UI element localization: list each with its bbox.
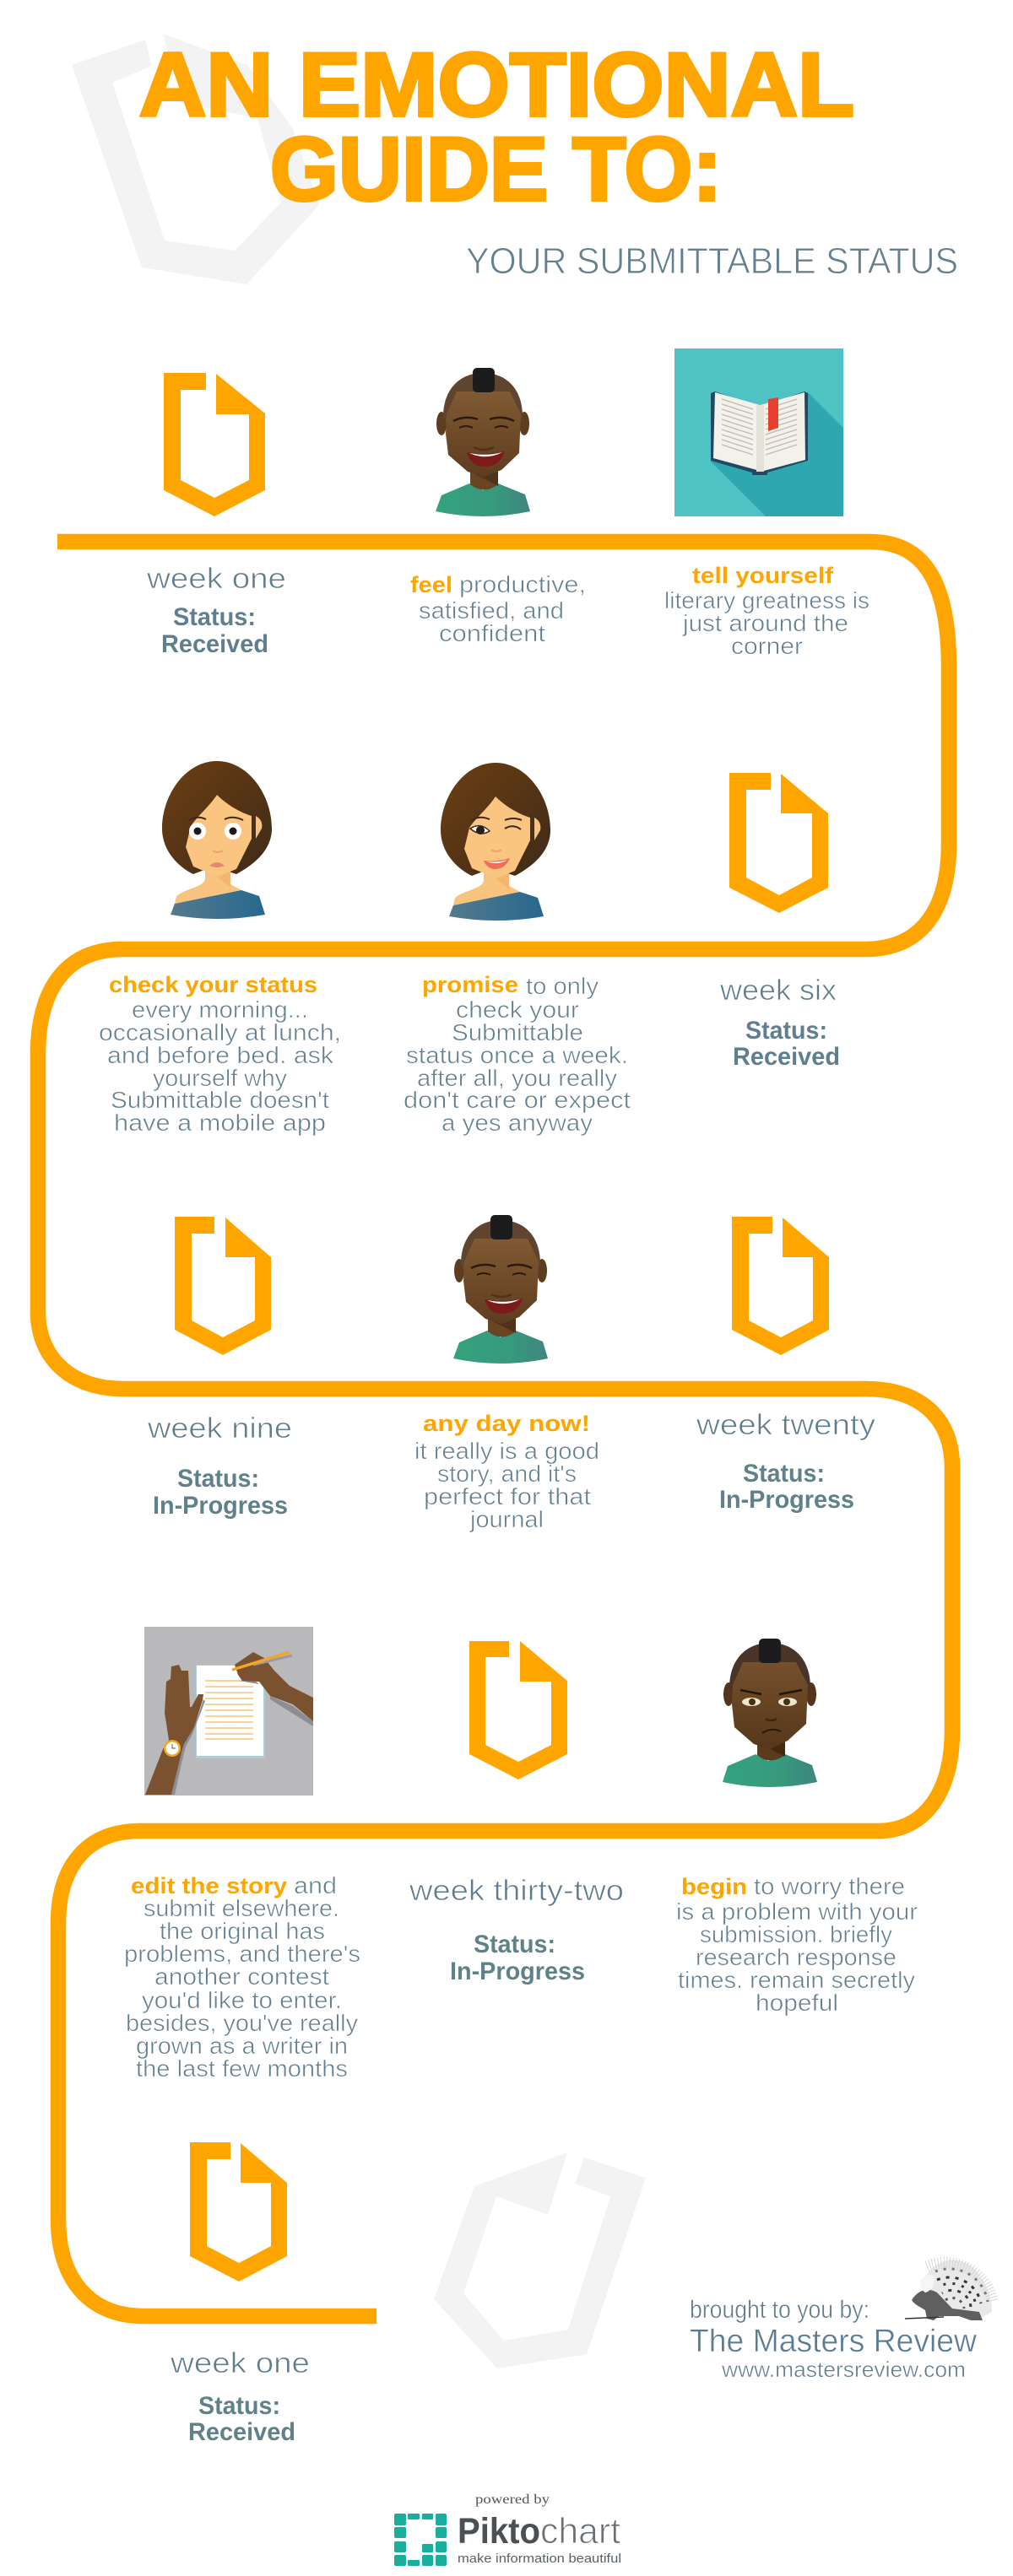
week six label: week six — [719, 975, 837, 1007]
icon: open book tile — [674, 348, 843, 516]
text: promise — [404, 972, 631, 1136]
title: AN EMOTIONAL — [139, 34, 854, 135]
credit: The Masters Review — [690, 2296, 978, 2382]
final week one label: week one — [170, 2347, 310, 2379]
text: edit the story: besides, you've really — [126, 2010, 358, 2036]
logo: Piktochart wordmark: chart — [540, 2511, 620, 2552]
icon: document final week one — [190, 2142, 287, 2282]
logo: Piktochart wordmark — [458, 2511, 621, 2566]
icon: document week twenty — [732, 1217, 829, 1355]
week twenty label: week twenty — [696, 1409, 875, 1441]
week nine label: week nine — [147, 1412, 292, 1445]
text: promise: to only — [526, 973, 599, 999]
text: edit the story: problems, and there's — [124, 1941, 360, 1967]
status in-progress: Status: — [743, 1460, 825, 1488]
status in-progress — [450, 1931, 585, 1985]
text: feel productive — [410, 571, 586, 646]
text: feel productive: confident — [439, 620, 545, 646]
status received: Received — [161, 630, 268, 658]
text: edit the story: edit the story — [131, 1873, 287, 1898]
credit: The Masters Review: brought to you by: — [690, 2296, 869, 2324]
icon: document week nine — [175, 1217, 271, 1355]
status in-progress: Status: — [474, 1931, 555, 1958]
text: begin to worry: is a problem with your — [676, 1898, 918, 1925]
status received: Status: — [173, 603, 256, 631]
avatar: laughing man — [453, 1215, 548, 1364]
text: begin to worry: research response — [696, 1944, 897, 1970]
watermark: bottom document icon — [434, 2152, 646, 2368]
text: check your status: occasionally at lunch, — [99, 1019, 341, 1045]
status received: Received — [733, 1043, 840, 1071]
watermark: top document icon — [72, 34, 319, 284]
text: edit the story: grown as a writer in — [136, 2033, 348, 2059]
icon: document week one — [164, 373, 265, 516]
week thirty-two label: week thirty-two — [409, 1875, 624, 1907]
icon: document week six — [729, 773, 828, 913]
text: any day now: story, and it's — [437, 1461, 577, 1487]
icon: hands writing on paper — [144, 1627, 313, 1796]
text: tell yourself — [664, 563, 869, 659]
status received: Status: — [198, 2392, 280, 2420]
text: any day now: perfect for that — [424, 1483, 591, 1509]
text: promise: status once a week. — [406, 1042, 628, 1068]
text: any day now: it really is a good — [414, 1438, 599, 1464]
title: GUIDE TO: — [270, 118, 722, 219]
text: edit the story: you'd like to enter. — [142, 1987, 342, 2013]
text: feel productive: feel — [410, 572, 452, 597]
text: check your status: check your status — [109, 972, 317, 997]
text: any day now: journal — [469, 1506, 544, 1532]
status in-progress: In-Progress — [153, 1492, 288, 1520]
status in-progress — [719, 1460, 854, 1514]
text: any day now — [414, 1411, 599, 1532]
title — [139, 34, 854, 219]
logo: Piktochart wordmark: Pikto — [458, 2511, 540, 2552]
text: promise: a yes anyway — [441, 1110, 593, 1136]
text: check your status: every morning... — [132, 996, 308, 1023]
credit: The Masters Review: www.mastersreview.com — [721, 2357, 966, 2382]
text: promise: don't care or expect — [404, 1087, 631, 1113]
text: promise: Submittable — [452, 1019, 583, 1045]
logo: Piktochart mark — [394, 2514, 447, 2566]
status received: Status: — [745, 1017, 827, 1045]
text: edit the story: another contest — [154, 1963, 329, 1990]
text: check your status — [99, 972, 341, 1136]
status in-progress: In-Progress — [450, 1958, 585, 1985]
avatar: laughing man — [436, 368, 530, 516]
footer: powered by: powered by — [475, 2492, 550, 2507]
text: check your status: have a mobile app — [114, 1110, 326, 1136]
text: check your status: Submittable doesn't — [111, 1087, 329, 1113]
text: tell yourself: tell yourself — [692, 563, 834, 588]
text: tell yourself: just around the — [682, 610, 848, 636]
status received — [733, 1017, 840, 1071]
status received — [161, 603, 268, 658]
text: begin to worry: begin — [681, 1874, 747, 1899]
avatar: frowning man — [723, 1639, 817, 1787]
text: feel productive: satisfied, and — [419, 597, 564, 624]
text: edit the story — [124, 1872, 360, 2082]
text: promise: check your — [456, 996, 579, 1023]
status received — [188, 2392, 295, 2446]
status in-progress: In-Progress — [719, 1486, 854, 1514]
text: begin to worry — [676, 1873, 918, 2016]
text: check your status: and before bed. ask — [107, 1042, 334, 1068]
text: edit the story: and — [294, 1872, 337, 1898]
text: edit the story: submit elsewhere. — [144, 1895, 339, 1921]
text: promise: after all, you really — [417, 1065, 617, 1091]
subtitle: YOUR SUBMITTABLE STATUS — [466, 240, 958, 282]
winding orange path — [38, 542, 952, 2316]
text: tell yourself: corner — [731, 633, 803, 659]
text: tell yourself: literary greatness is — [664, 587, 869, 613]
text: feel productive: productive, — [459, 571, 586, 597]
status in-progress: Status: — [177, 1465, 259, 1493]
text: begin to worry: times. remain secretly — [678, 1967, 915, 1993]
status in-progress — [153, 1465, 288, 1520]
credit: The Masters Review: The Masters Review — [690, 2324, 978, 2359]
text: begin to worry: submission. briefly — [700, 1921, 892, 1947]
text: promise: promise — [422, 972, 518, 997]
text: edit the story: the original has — [160, 1918, 325, 1944]
text: any day now: any day now! — [423, 1411, 590, 1436]
week one label: week one — [146, 563, 286, 595]
icon: porcupine — [905, 2260, 993, 2320]
avatar: worried woman — [162, 761, 272, 919]
text: check your status: yourself why — [153, 1065, 287, 1091]
status received: Received — [188, 2418, 295, 2446]
text: begin to worry: to worry there — [754, 1873, 905, 1899]
icon: document week thirty-two — [469, 1641, 567, 1779]
avatar: winking woman — [441, 763, 550, 921]
logo: Piktochart wordmark: make information beautiful — [458, 2552, 621, 2566]
text: begin to worry: hopeful — [756, 1990, 838, 2016]
text: edit the story: the last few months — [136, 2055, 348, 2082]
